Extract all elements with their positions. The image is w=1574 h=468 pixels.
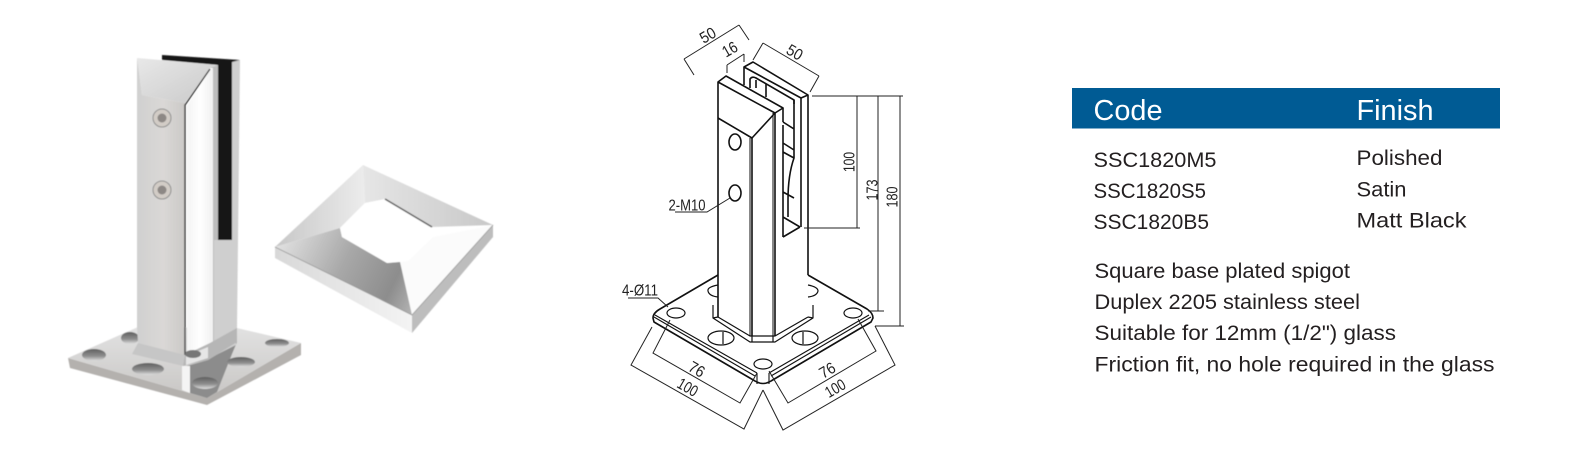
base dimension lines <box>628 198 895 430</box>
finishes: Matt Black <box>1356 208 1467 232</box>
technical drawing <box>622 25 904 430</box>
product codes: SSC1820S5 <box>1094 179 1206 203</box>
base holes <box>667 285 862 369</box>
dimension lines <box>684 25 904 326</box>
hole: M10 lower <box>729 185 741 201</box>
dimension labels: 173 <box>864 179 882 200</box>
product description: Friction fit, no hole required in the glass <box>1094 352 1494 376</box>
dimension labels: 100 <box>674 375 701 401</box>
dimension labels: 100 <box>822 376 849 402</box>
dimension labels: 100 <box>842 152 858 172</box>
gasket (black rubber) <box>162 55 240 240</box>
product codes: SSC1820M5 <box>1094 148 1217 172</box>
dimension labels: 4-Ø11 <box>622 282 658 300</box>
hole: M10 upper <box>729 134 741 150</box>
dimension labels: 16 <box>720 39 741 61</box>
product codes <box>1094 148 1217 234</box>
product description: Square base plated spigot <box>1094 259 1350 283</box>
table header bar <box>1072 88 1500 128</box>
photo: polished spigot on square base <box>68 55 301 405</box>
front clamp plate <box>718 76 783 336</box>
header: Code: Code <box>1094 95 1162 127</box>
product description: Suitable for 12mm (1/2") glass <box>1094 321 1396 345</box>
dimension labels: 76 <box>685 359 708 382</box>
photo: square cover plate <box>275 165 493 333</box>
finishes: Polished <box>1356 146 1442 170</box>
column bracket <box>132 58 237 366</box>
dimension labels: 76 <box>817 360 839 382</box>
back plate outline <box>744 62 808 275</box>
dimension labels: 50 <box>783 42 806 65</box>
finishes: Satin <box>1356 178 1406 202</box>
dimension labels <box>622 25 902 402</box>
dimension labels: 50 <box>697 25 720 47</box>
back plate strip <box>214 60 240 356</box>
finishes <box>1356 146 1467 232</box>
base holes <box>82 332 289 389</box>
base plate <box>68 327 301 405</box>
product codes: SSC1820B5 <box>1094 210 1209 234</box>
dimension labels: 180 <box>884 186 902 208</box>
base plate outline <box>653 275 873 384</box>
product description: Duplex 2205 stainless steel <box>1094 290 1360 314</box>
dimension labels: 2-M10 <box>668 198 706 214</box>
header: Finish: Finish <box>1356 95 1434 127</box>
product description <box>1094 259 1494 376</box>
bolts <box>153 109 171 199</box>
